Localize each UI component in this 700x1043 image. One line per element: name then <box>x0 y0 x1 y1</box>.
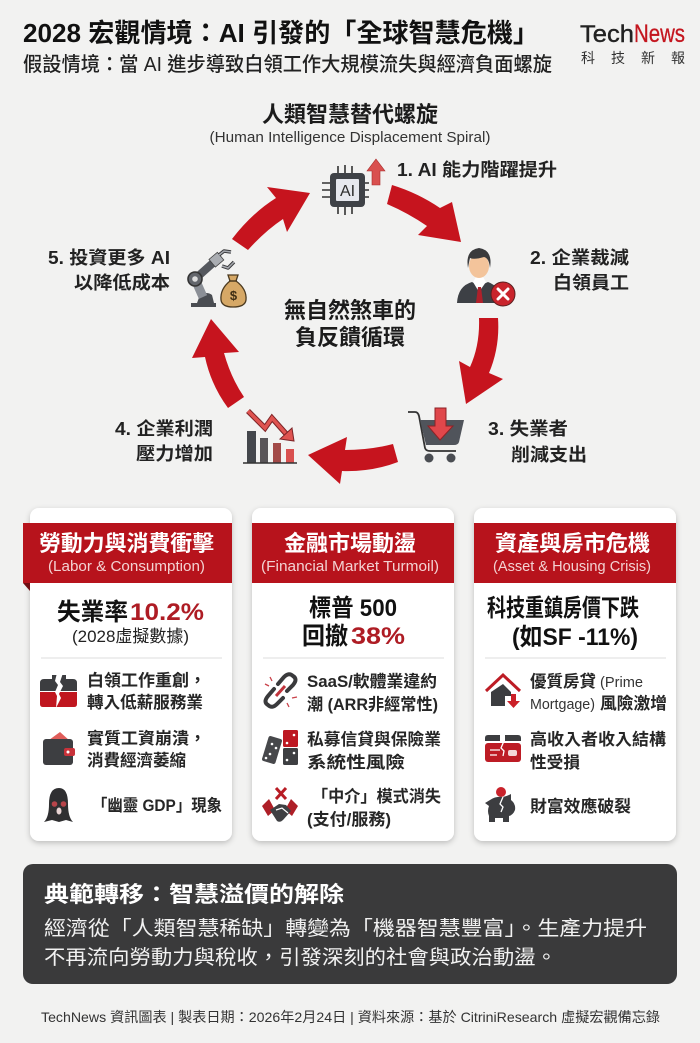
text: private credit and insurance: 系統性風險 <box>307 752 406 772</box>
key metric: unemployment: (2028虛擬數據) <box>72 627 189 646</box>
logo: TechNews <box>580 20 685 66</box>
icon: robot arm with money bag <box>188 251 246 307</box>
key metric: unemployment: 10.2% <box>130 599 204 626</box>
text: high earners income: 高收入者收入結構 <box>530 729 667 749</box>
header banner: labor: (Labor & Consumption) <box>48 559 205 575</box>
panel: paradigm shift callout: 經濟從「人類智慧稀缺」轉變為「機器智慧豐富」。生產力提升 <box>44 917 647 940</box>
text: intermediary model disappears: (支付/服務) <box>307 809 391 829</box>
key metric: tech hub home prices: 科技重鎮房價下跌 <box>487 595 639 622</box>
icon: empty wallet <box>43 732 75 765</box>
arrow: step 5 to step 1 <box>232 187 310 250</box>
key metric: tech hub home prices: (如SF -11%) <box>512 624 638 651</box>
center label: no natural brake: 負反饋循環 <box>295 325 405 350</box>
icon: falling dominoes <box>262 730 298 765</box>
text: white-collar jobs hit: 轉入低薪服務業 <box>87 692 203 712</box>
text: real wages collapse: 消費經濟萎縮 <box>87 750 186 770</box>
icon: house with down arrow <box>486 675 520 708</box>
label: step 2: 2. 企業裁減 <box>530 247 629 268</box>
icon: shopping cart with down arrow <box>408 408 464 462</box>
center label: no natural brake: 無自然煞車的 <box>284 298 416 323</box>
label: step 2: 白領員工 <box>553 272 629 293</box>
key metric: S&P 500 drawdown <box>302 595 405 650</box>
label: step 5: 5. 投資更多 AI <box>48 247 170 268</box>
text: ghost GDP: 「幽靈 GDP」現象 <box>92 795 222 815</box>
text: wealth effect: 財富效應破裂 <box>530 796 631 816</box>
arrow: step 3 to step 4 <box>308 437 398 484</box>
label: step 3 <box>488 419 587 465</box>
icon: laid-off white-collar worker <box>457 248 515 306</box>
icon: ghost <box>44 788 73 822</box>
header banner: labor <box>23 523 232 583</box>
panel: asset and housing crisis <box>474 508 676 841</box>
text: white-collar jobs hit: 白領工作重創， <box>87 670 206 690</box>
panel: financial market turmoil <box>252 508 454 841</box>
key metric: unemployment <box>57 599 204 646</box>
panel: paradigm shift callout: 不再流向勞動力與稅收，引發深刻的社會與政治動盪。 <box>44 946 557 969</box>
label: step 5: 以降低成本 <box>74 272 170 293</box>
header banner: labor: 勞動力與消費衝擊 <box>39 531 214 556</box>
icon: robot arm with money bag: $ <box>230 288 238 303</box>
icon: broken bank card <box>485 735 521 762</box>
label: step 4: 4. 企業利潤 <box>115 418 213 439</box>
text: private credit and insurance <box>307 729 441 772</box>
text: prime mortgage risk: Mortgage) <box>530 696 595 713</box>
header banner: housing: 資產與房市危機 <box>495 531 650 556</box>
header banner: housing <box>474 523 676 583</box>
label: step 1: 1. AI 能力階躍提升 <box>397 159 557 180</box>
logo: TechNews: 科技新報 <box>581 50 685 66</box>
text: prime mortgage risk <box>530 671 667 713</box>
text: prime mortgage risk: (Prime <box>600 674 643 691</box>
text: SaaS default wave: SaaS/軟體業違約 <box>307 671 437 691</box>
label: step 5 <box>48 247 170 293</box>
text: real wages collapse <box>87 728 206 770</box>
text: private credit and insurance: 私募信貸與保險業 <box>307 729 441 749</box>
text: SaaS default wave <box>307 671 438 714</box>
logo: TechNews: Tech <box>580 21 634 48</box>
text: white-collar jobs hit <box>87 670 206 712</box>
icon: cracked piggy bank <box>485 787 515 822</box>
text: prime mortgage risk: 優質房貸 <box>530 671 596 691</box>
footer source line: TechNews 資訊圖表 | 製表日期：2026年2月24日 | 資料來源：基於 CitriniResearch 虛擬宏觀備忘錄 <box>41 1009 660 1025</box>
icon: broken chain <box>265 674 297 707</box>
label: step 4: 壓力增加 <box>136 444 213 464</box>
arrow: step 2 to step 3 <box>459 318 503 404</box>
spiral heading: 人類智慧替代螺旋 <box>262 102 438 127</box>
text: prime mortgage risk: 風險激增 <box>600 693 667 713</box>
header banner: financial: (Financial Market Turmoil) <box>261 559 439 575</box>
arrow: step 1 to step 2 <box>387 185 461 242</box>
arrow: step 4 to step 5 <box>192 319 244 408</box>
header banner: financial <box>252 523 454 583</box>
subtitle: 假設情境：當 AI 進步導致白領工作大規模流失與經濟負面螺旋 <box>23 53 552 76</box>
label: step 4 <box>115 418 213 464</box>
key metric: S&P 500 drawdown: 38% <box>351 623 405 650</box>
header banner: housing: (Asset & Housing Crisis) <box>493 559 651 575</box>
icon: handshake with cross <box>262 788 298 822</box>
spiral heading <box>210 102 490 146</box>
text: intermediary model disappears <box>307 787 441 829</box>
center label: no natural brake <box>284 298 416 350</box>
text: real wages collapse: 實質工資崩潰， <box>87 728 206 748</box>
icon: falling bar chart <box>243 411 297 463</box>
icon: broken briefcase <box>40 673 77 708</box>
spiral heading: (Human Intelligence Displacement Spiral) <box>210 129 490 146</box>
header banner: financial: 金融市場動盪 <box>284 531 416 556</box>
title: 2028 宏觀情境：AI 引發的「全球智慧危機」 <box>23 18 539 48</box>
key metric: S&P 500 drawdown: 標普 500 <box>309 595 397 622</box>
label: step 3: 3. 失業者 <box>488 419 568 439</box>
key metric: unemployment: 失業率 <box>57 599 128 626</box>
label: step 2 <box>530 247 629 293</box>
label: step 3: 削減支出 <box>511 444 587 465</box>
text: SaaS default wave: 潮 (ARR非經常性) <box>307 694 438 714</box>
key metric: S&P 500 drawdown: 回撤 <box>302 623 348 650</box>
text: high earners income <box>530 729 667 772</box>
panel: paradigm shift callout: 典範轉移：智慧溢價的解除 <box>44 882 344 907</box>
panel: paradigm shift callout <box>23 864 677 984</box>
panel: labor and consumption <box>23 508 232 841</box>
icon: AI chip with up arrow <box>322 159 385 215</box>
text: high earners income: 性受損 <box>530 753 581 772</box>
icon: AI chip with up arrow: AI <box>340 183 355 200</box>
logo: TechNews: News <box>634 20 685 48</box>
text: intermediary model disappears: 「中介」模式消失 <box>312 787 441 806</box>
key metric: tech hub home prices <box>487 595 639 651</box>
